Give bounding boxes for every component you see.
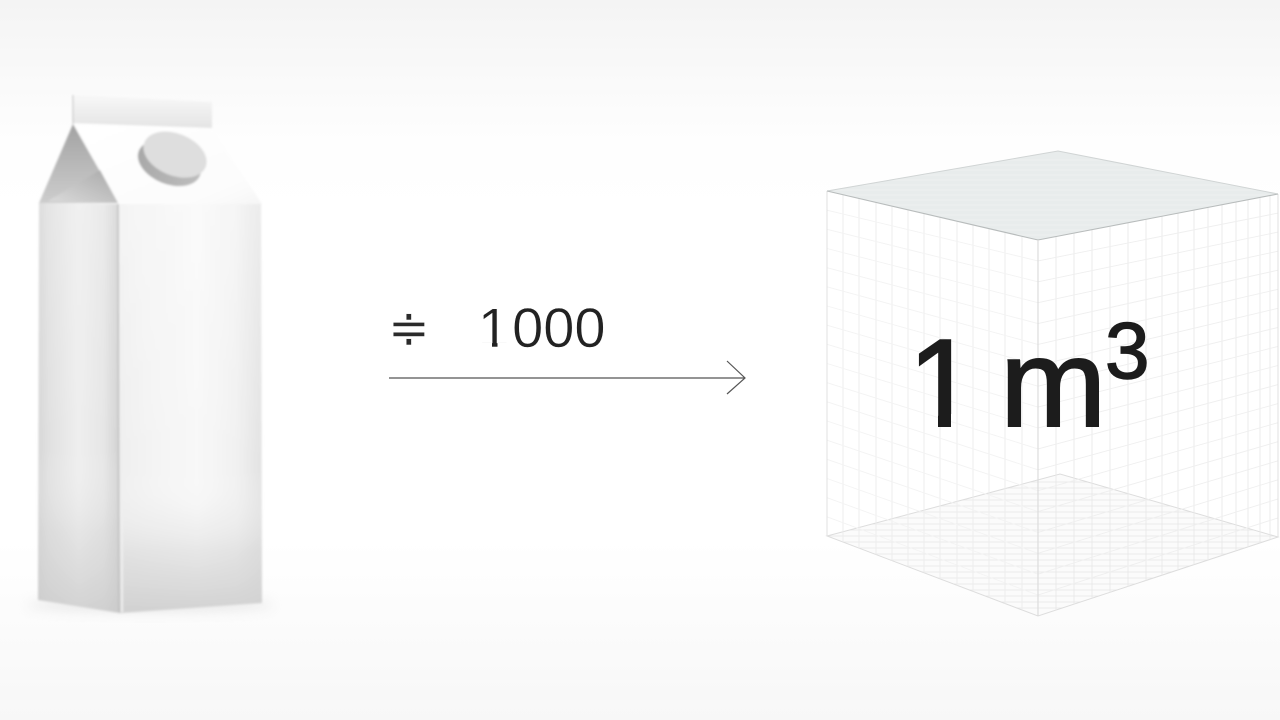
icon: milk carton [25,95,275,613]
gable fold [48,170,118,203]
top face [820,151,1280,240]
number 1000: 1000 [478,296,606,359]
cap [131,122,214,196]
carton body [38,95,262,613]
right face [118,204,262,613]
wireframe cube [820,150,1280,620]
corner edge [118,204,119,612]
left face [38,203,120,613]
label: 1 m cubed [918,322,1147,427]
bottom face [820,474,1280,616]
arrow [389,361,745,394]
gable [39,124,118,203]
left face grid [826,191,1038,610]
cap top [137,123,214,186]
divide symbol: ≑ [388,299,430,357]
cap rim [131,131,208,195]
roof panel [73,124,262,204]
label: 1 m cubed: 3 [1105,306,1150,395]
corner highlight [120,380,123,612]
carton shadow [25,599,275,611]
label: 1 m cubed: m [1000,314,1106,453]
label: 1 m cubed: 1 [908,315,977,453]
right face grid [1038,194,1278,610]
top strip [73,95,212,128]
cube front edges [827,191,1278,616]
